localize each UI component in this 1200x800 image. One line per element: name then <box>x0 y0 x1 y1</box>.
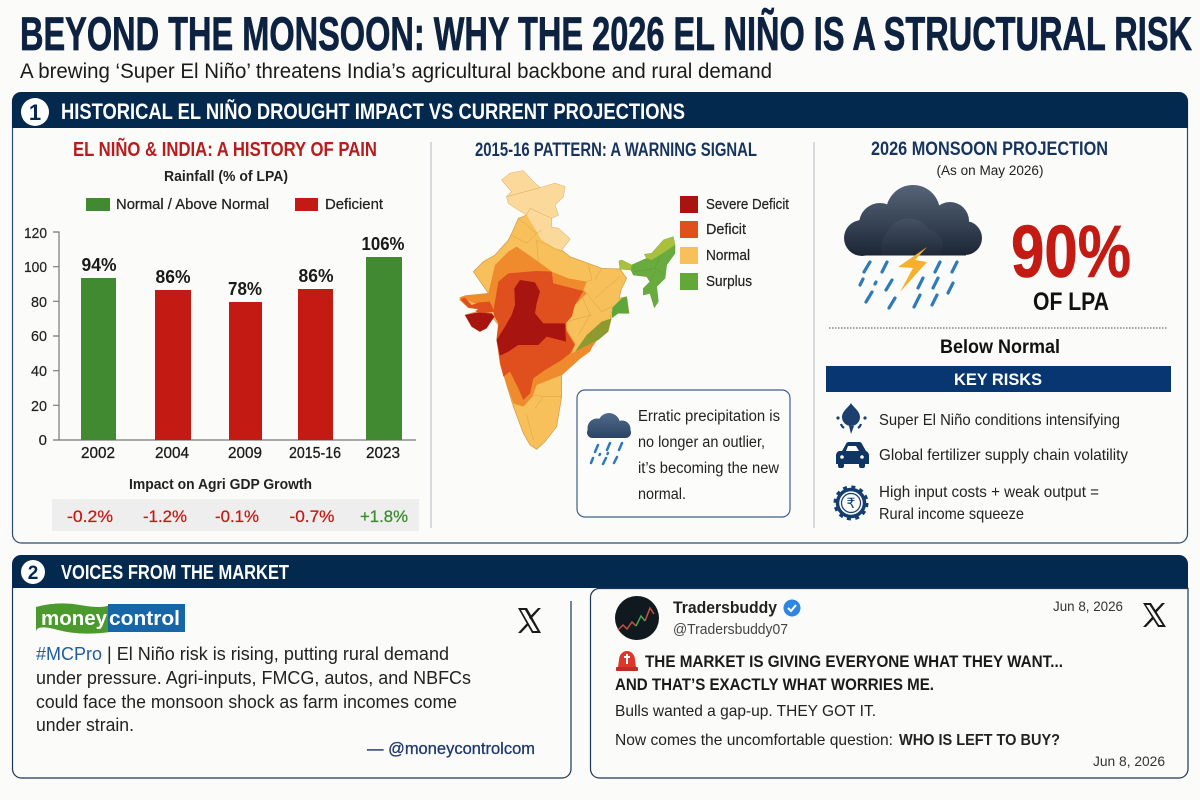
handle: @Tradersbuddy07 <box>673 621 788 638</box>
logo: moneycontrol: control <box>109 607 180 630</box>
post footer date: Jun 8, 2026 <box>1093 753 1165 769</box>
big stat 90 percent: 90% <box>1011 210 1131 293</box>
bar chart: rainfall: 0 <box>39 432 47 449</box>
map of India: 2015-16 rainfall deficit <box>460 171 675 449</box>
middle column heading: 2015-16 PATTERN: A WARNING SIGNAL <box>475 140 757 161</box>
risk list: Rural income squeeze <box>879 506 1024 523</box>
risk list: Super El Niño conditions intensifying <box>879 412 1120 429</box>
risk list: High input costs + weak output = <box>879 484 1099 501</box>
bar chart: rainfall: 86% <box>298 266 334 286</box>
logo: moneycontrol: money <box>41 607 108 630</box>
icon: rupee gear <box>835 487 867 519</box>
post attribution: — @moneycontrolcom <box>367 740 535 758</box>
bar chart: rainfall: 40 <box>31 363 47 380</box>
callout: erratic precipitation <box>577 390 790 517</box>
big stat 90 percent: OF LPA <box>1033 288 1109 316</box>
section 2 header bar <box>12 555 1188 588</box>
post text: #MCPro | El Niño risk is rising, putting rural demand <box>36 644 449 664</box>
chart legend: Normal / Above Normal <box>116 196 269 213</box>
section 2 header bar: 2 <box>28 563 38 584</box>
icon: X logo <box>518 608 541 633</box>
bar chart: rainfall <box>24 225 416 462</box>
bar chart: rainfall: 94% <box>82 255 116 275</box>
icon: storm cloud <box>844 185 982 308</box>
section 1 header bar: 1 <box>29 100 41 125</box>
bar chart: rainfall: 60 <box>31 328 47 345</box>
below normal label: Below Normal <box>940 336 1060 358</box>
map legend: Deficit <box>706 222 746 238</box>
logo: moneycontrol <box>36 603 185 634</box>
section 1 header bar: HISTORICAL EL NIÑO DROUGHT IMPACT VS CURRENT PROJECTIONS <box>61 99 685 124</box>
panel: voices from the market <box>12 555 1188 778</box>
agri GDP impact strip: -1.2% <box>143 507 187 526</box>
post text: under strain. <box>36 715 134 735</box>
agri GDP impact strip: -0.2% <box>67 507 113 526</box>
agri GDP impact strip <box>52 477 419 531</box>
icon: rain cloud <box>587 413 631 464</box>
agri GDP impact strip: Impact on Agri GDP Growth <box>129 477 312 493</box>
bar chart: rainfall: 86% <box>156 267 190 287</box>
risk list <box>835 403 1128 523</box>
panel: historical impact vs projections <box>12 92 1188 543</box>
bar chart: rainfall: 2009 <box>228 445 262 462</box>
right column heading: 2026 MONSOON PROJECTION <box>871 138 1108 160</box>
post text: under pressure. Agri-inputs, FMCG, autos, and NBFCs <box>36 668 471 688</box>
icon: siren <box>616 651 638 671</box>
icon: rupee gear: ₹ <box>847 496 856 512</box>
bar chart: rainfall: 2015-16 <box>289 445 341 462</box>
map legend: Severe Deficit <box>706 197 789 213</box>
map legend: Normal <box>706 248 750 264</box>
icon: car <box>836 442 869 468</box>
post text <box>36 644 471 735</box>
risk list: Global fertilizer supply chain volatility <box>879 447 1128 464</box>
agri GDP impact strip: -0.1% <box>215 507 259 526</box>
post text: could face the monsoon shock as farm incomes come <box>36 692 457 712</box>
key risks banner: KEY RISKS <box>954 371 1042 389</box>
bar chart: rainfall: 100 <box>24 259 47 276</box>
post body: WHO IS LEFT TO BUY? <box>899 732 1060 749</box>
bar chart: rainfall: 80 <box>31 294 47 311</box>
map legend <box>680 196 789 290</box>
agri GDP impact strip: -0.7% <box>290 507 334 526</box>
callout: erratic precipitation: no longer an outlier, <box>638 434 765 451</box>
section 1 header bar <box>12 92 1188 128</box>
key risks banner <box>826 366 1171 392</box>
bar chart: rainfall: 106% <box>362 234 404 254</box>
post body <box>615 703 1060 749</box>
icon: storm droplet <box>836 403 867 434</box>
chart legend: Deficient <box>325 196 384 213</box>
post body: Bulls wanted a gap-up. THEY GOT IT. <box>615 703 876 720</box>
icon: X logo <box>1143 603 1166 627</box>
post body: Now comes the uncomfortable question: <box>615 732 893 749</box>
post headline: THE MARKET IS GIVING EVERYONE WHAT THEY WANT... <box>645 653 1063 671</box>
callout: erratic precipitation: it’s becoming the new <box>638 460 780 477</box>
chart legend <box>86 196 384 213</box>
card: Tradersbuddy post <box>590 588 1188 778</box>
avatar <box>615 596 659 640</box>
bar chart: rainfall: 2004 <box>155 445 189 462</box>
account name: Tradersbuddy <box>673 599 778 617</box>
bar chart: rainfall: 2002 <box>81 445 115 462</box>
callout: erratic precipitation: normal. <box>638 486 686 503</box>
post headline <box>615 653 1063 694</box>
chart subtitle: Rainfall (% of LPA) <box>164 169 288 185</box>
post date: Jun 8, 2026 <box>1053 599 1123 614</box>
big stat 90 percent <box>1011 210 1131 316</box>
map legend: Surplus <box>706 274 752 290</box>
post headline: AND THAT’S EXACTLY WHAT WORRIES ME. <box>615 676 934 694</box>
left column heading: EL NIÑO & INDIA: A HISTORY OF PAIN <box>73 138 377 161</box>
agri GDP impact strip: +1.8% <box>360 507 408 526</box>
section 2 header bar: VOICES FROM THE MARKET <box>61 562 289 584</box>
bar chart: rainfall: 120 <box>24 225 47 242</box>
as-on date: (As on May 2026) <box>936 163 1044 178</box>
subtitle: A brewing ‘Super El Niño’ threatens India’s agricultural backbone and rural demand <box>20 60 772 83</box>
bar chart: rainfall: 2023 <box>366 445 400 462</box>
callout: erratic precipitation: Erratic precipitation is <box>638 408 780 425</box>
bar chart: rainfall: 20 <box>31 398 47 415</box>
bar chart: rainfall: 78% <box>228 279 262 299</box>
icon: verified badge <box>784 600 800 616</box>
card: moneycontrol post <box>12 588 571 778</box>
